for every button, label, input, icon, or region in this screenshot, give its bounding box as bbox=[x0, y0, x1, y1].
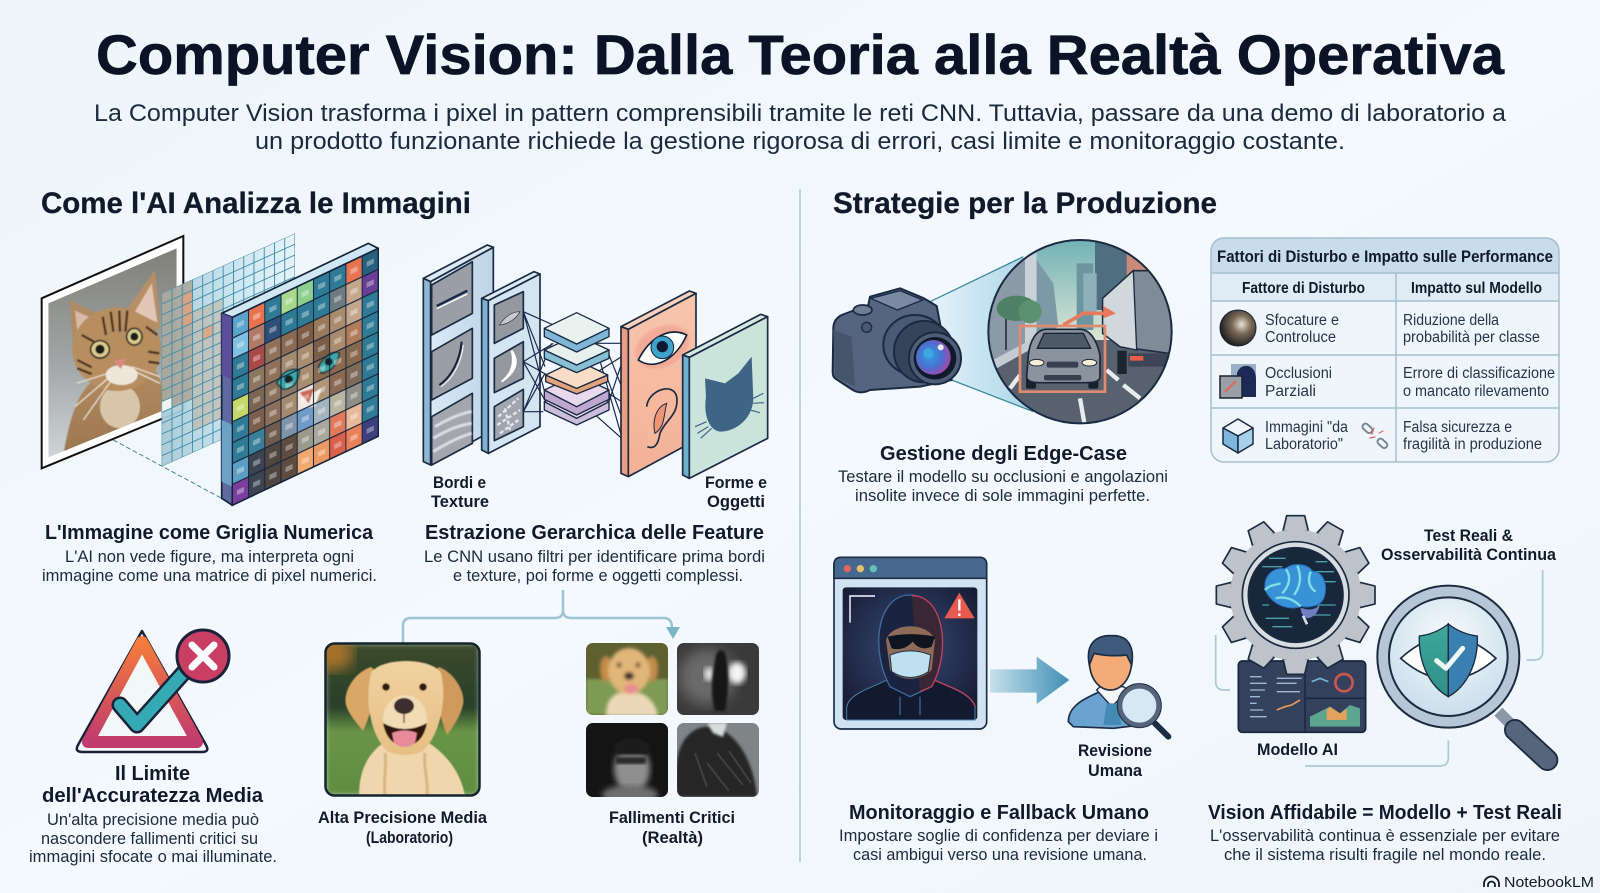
text block: edge cases: insolite invece di sole immagini perfette. bbox=[855, 487, 1150, 505]
text block: average accuracy limit: Il Limite bbox=[115, 762, 190, 785]
row 3 impact: fragilità in produzione bbox=[1403, 436, 1542, 453]
intro paragraph: un prodotto funzionante richiede la gestione rigorosa di errori, casi limite e monitoraggio costante. bbox=[255, 128, 1345, 155]
icon: blur and backlight bbox=[1220, 310, 1256, 346]
row 3 impact bbox=[1403, 419, 1542, 453]
text block: edge cases: Testare il modello su occlusioni e angolazioni bbox=[838, 468, 1168, 486]
layer panel: edges bbox=[423, 245, 493, 465]
label: human review bbox=[1078, 741, 1152, 780]
row 1 factor: Controluce bbox=[1265, 329, 1336, 346]
row 1 factor bbox=[1265, 312, 1339, 346]
stacked feature blocks bbox=[544, 313, 609, 425]
illustration: image as numeric grid bbox=[42, 233, 378, 505]
text block: average accuracy limit bbox=[29, 762, 277, 866]
table: disturbance factors and impact bbox=[1211, 238, 1559, 462]
thumbnail: blurred dog bbox=[586, 643, 668, 716]
text block: reliable vision: che il sistema risulti fragile nel mondo reale. bbox=[1224, 846, 1546, 864]
label: human review: Revisione bbox=[1078, 741, 1152, 760]
thumbnail: backlit figure bbox=[677, 643, 759, 715]
text block: numeric grid: L'AI non vede figure, ma interpreta ogni bbox=[65, 548, 354, 566]
row 3 factor: Immagini "da bbox=[1265, 419, 1348, 436]
title: Computer Vision: Dalla Teoria alla Realtà Operativa bbox=[96, 23, 1505, 86]
row 2 impact bbox=[1403, 365, 1555, 400]
text block: numeric grid bbox=[42, 521, 377, 585]
column header: factor: Fattore di Disturbo bbox=[1242, 280, 1365, 297]
label: human review: Umana bbox=[1088, 761, 1143, 780]
intro paragraph bbox=[94, 100, 1507, 155]
heading: left section: Come l'AI Analizza le Immagini bbox=[41, 187, 471, 220]
layer panel: cat silhouette bbox=[683, 314, 768, 478]
layer panel: parts bbox=[482, 272, 540, 453]
row 2 factor: Parziali bbox=[1265, 383, 1316, 400]
text block: edge cases bbox=[838, 442, 1168, 505]
label: shapes and objects: Oggetti bbox=[707, 492, 765, 511]
arrow to human review bbox=[990, 657, 1069, 704]
row 2 factor bbox=[1265, 365, 1332, 400]
label: lab precision bbox=[318, 808, 488, 847]
label: edges and textures bbox=[431, 473, 489, 511]
NotebookLM badge: NotebookLM bbox=[1504, 875, 1594, 891]
view cone bbox=[930, 257, 1033, 412]
label: lab precision: Alta Precisione Media bbox=[318, 808, 488, 827]
label: edges and textures: Bordi e bbox=[433, 473, 486, 492]
text block: average accuracy limit: nascondere fallimenti critici su bbox=[41, 830, 258, 848]
illustration: camera and street edge case bbox=[833, 237, 1173, 430]
label: critical failures: Fallimenti Critici bbox=[609, 808, 735, 827]
arrowhead bbox=[666, 627, 680, 639]
text block: reliable vision: L'osservabilità continua è essenziale per evitare bbox=[1210, 827, 1560, 845]
label: critical failures: (Realtà) bbox=[642, 828, 703, 847]
thumbnail: occluded animal bbox=[676, 723, 759, 797]
text block: average accuracy limit: immagini sfocate o mai illuminate. bbox=[29, 848, 277, 866]
label: critical failures bbox=[609, 808, 735, 847]
icon: lab cube bbox=[1223, 419, 1253, 453]
label: real tests and observability bbox=[1381, 526, 1557, 564]
text block: feature extraction: e texture, poi forme e oggetti complessi. bbox=[453, 567, 743, 585]
camera body bbox=[833, 288, 961, 392]
text block: reliable vision bbox=[1208, 801, 1562, 864]
photo: labrador lab image bbox=[313, 635, 480, 796]
row 3 factor: Laboratorio" bbox=[1265, 436, 1343, 453]
row 1 factor: Sfocature e bbox=[1265, 312, 1339, 329]
dashed projection line bbox=[113, 440, 222, 498]
row 3 impact: Falsa sicurezza e bbox=[1403, 419, 1512, 436]
thumbnail: dark face bbox=[586, 723, 668, 805]
text block: monitoring bbox=[839, 801, 1158, 864]
row 1 impact bbox=[1403, 312, 1540, 346]
text block: average accuracy limit: Un'alta precisione media può bbox=[47, 811, 259, 829]
text block: numeric grid: L'Immagine come Griglia Numerica bbox=[45, 521, 374, 544]
icon: broken chain bbox=[1361, 422, 1388, 449]
gear with brain bbox=[1216, 516, 1375, 674]
table title: Fattori di Disturbo e Impatto sulle Performance bbox=[1217, 247, 1553, 266]
intro paragraph: La Computer Vision trasforma i pixel in pattern comprensibili tramite le reti CNN. Tuttavia, passare da una demo di laboratorio a bbox=[94, 100, 1507, 127]
layer panel: eye and ear bbox=[621, 291, 697, 477]
text block: average accuracy limit: dell'Accuratezza Media bbox=[42, 784, 264, 807]
row 2 factor: Occlusioni bbox=[1265, 365, 1332, 382]
label: real tests and observability: Test Reali & bbox=[1424, 526, 1513, 545]
heading: right section: Strategie per la Produzione bbox=[833, 187, 1217, 220]
street scene circle bbox=[987, 237, 1173, 430]
row 3 factor bbox=[1265, 419, 1348, 453]
text block: numeric grid: immagine come una matrice di pixel numerici. bbox=[42, 567, 377, 585]
ambiguous detection window bbox=[834, 557, 987, 729]
label: shapes and objects bbox=[705, 473, 767, 511]
text block: monitoring: Monitoraggio e Fallback Umano bbox=[849, 801, 1149, 824]
connector arrow: lab to reality bbox=[403, 590, 672, 643]
row 2 impact: o mancato rilevamento bbox=[1403, 383, 1549, 400]
magnifier with shield and eye bbox=[1377, 586, 1547, 760]
text block: feature extraction bbox=[424, 521, 765, 585]
dashboard bbox=[1238, 661, 1366, 732]
column header: impact: Impatto sul Modello bbox=[1411, 280, 1542, 297]
text block: feature extraction: Estrazione Gerarchica delle Feature bbox=[425, 521, 764, 544]
row 1 impact: Riduzione della bbox=[1403, 312, 1499, 329]
row 1 impact: probabilità per classe bbox=[1403, 329, 1540, 346]
illustration: model plus real tests bbox=[1216, 516, 1547, 766]
network connections bbox=[523, 312, 622, 438]
human reviewer with magnifier bbox=[1068, 636, 1168, 737]
translucent pixel grid bbox=[162, 233, 295, 467]
illustration: hierarchical feature extraction bbox=[423, 245, 768, 478]
icon: accuracy warning triangle bbox=[77, 630, 229, 752]
text block: monitoring: Impostare soglie di confidenza per deviare i bbox=[839, 827, 1158, 845]
photo frame with cat bbox=[42, 236, 183, 468]
text block: reliable vision: Vision Affidabile = Modello + Test Reali bbox=[1208, 801, 1562, 824]
numeric matrix block bbox=[222, 243, 378, 505]
text block: monitoring: casi ambigui verso una revisione umana. bbox=[853, 846, 1147, 864]
icon: partial occlusion bbox=[1220, 364, 1256, 398]
label: lab precision: (Laboratorio) bbox=[366, 828, 453, 847]
row 2 impact: Errore di classificazione bbox=[1403, 365, 1555, 382]
illustration: monitoring and human fallback bbox=[834, 557, 1168, 737]
label: real tests and observability: Osservabilità Continua bbox=[1381, 545, 1557, 564]
text block: edge cases: Gestione degli Edge-Case bbox=[880, 442, 1127, 465]
label: shapes and objects: Forme e bbox=[705, 473, 767, 492]
label: edges and textures: Texture bbox=[431, 492, 489, 511]
text block: feature extraction: Le CNN usano filtri per identificare prima bordi bbox=[424, 548, 765, 566]
label: AI model: Modello AI bbox=[1257, 740, 1338, 759]
